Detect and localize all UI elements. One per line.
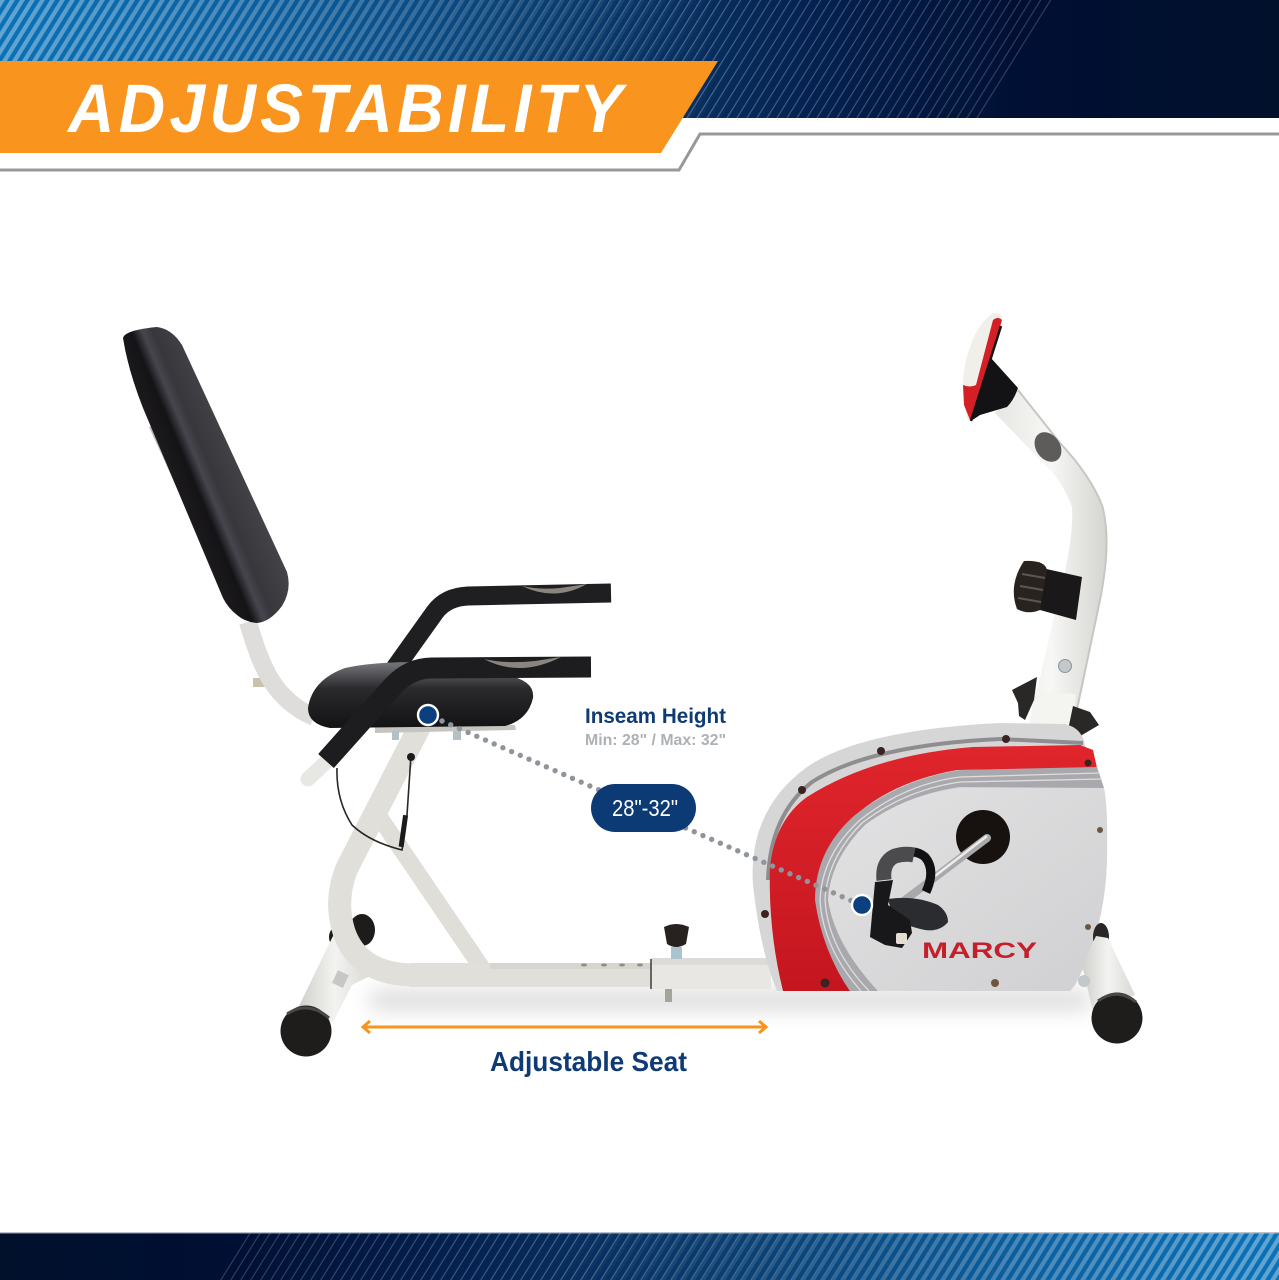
post bolt: [1058, 660, 1072, 672]
backrest support: [149, 426, 314, 717]
cable connector: [399, 753, 415, 847]
pedal marker dot: [852, 895, 872, 915]
dotted leader line: [442, 721, 852, 901]
brake clips: [1012, 677, 1099, 745]
rear arm handle: [395, 584, 611, 668]
footer band: [0, 1232, 1279, 1280]
inner panel: [828, 788, 1107, 991]
header outline rule: [0, 134, 1279, 170]
recumbent bike illustration: [123, 313, 1142, 1056]
seat cushion: [308, 662, 533, 728]
trim lines: [820, 773, 1102, 991]
front arm handle: [326, 657, 591, 761]
adjustment holes: [581, 964, 643, 966]
rear far wheel: [329, 914, 375, 946]
seat bracket and bolts: [375, 725, 516, 740]
adjustable seat callout: [363, 1021, 766, 1077]
sliding sleeve: [651, 958, 771, 1002]
backrest pad: [123, 327, 289, 623]
crank hub: [956, 810, 1010, 864]
pulse sensor cable: [337, 755, 411, 850]
flywheel housing: [753, 723, 1107, 991]
header band: [0, 0, 1279, 118]
range pill: 28"-32": [612, 795, 678, 821]
inseam callout: [418, 704, 872, 915]
upper rim line: [768, 739, 1083, 880]
seat end stub: [308, 763, 325, 779]
seat marker dot: [418, 705, 438, 725]
brand logo: MARCY: [922, 938, 1037, 963]
console display: [963, 313, 1018, 421]
title: ADJUSTABILITY: [66, 71, 628, 148]
silver trim: [815, 767, 1104, 991]
console post: [995, 390, 1107, 733]
range pill: [591, 784, 696, 832]
rear stabilizer foot: [280, 936, 372, 1056]
diagonal strut: [376, 812, 482, 968]
crank arm: [905, 836, 987, 900]
double arrow: [363, 1021, 766, 1033]
inseam heading: Inseam Height: [585, 704, 726, 728]
main frame: [340, 722, 660, 987]
inseam range note: Min: 28" / Max: 32": [585, 732, 726, 749]
adjustable seat label: Adjustable Seat: [490, 1046, 687, 1077]
housing screws: [761, 735, 1103, 988]
pedal: [870, 852, 948, 948]
tension knob: [1014, 561, 1082, 620]
post grommet: [1029, 427, 1067, 467]
front stabilizer foot: [1078, 923, 1142, 1044]
title banner: [0, 61, 718, 153]
floor shadow: [370, 990, 1090, 1010]
seat adjustment knob: [664, 924, 689, 959]
display cone mount: [971, 358, 1018, 421]
red band: [770, 745, 1097, 991]
